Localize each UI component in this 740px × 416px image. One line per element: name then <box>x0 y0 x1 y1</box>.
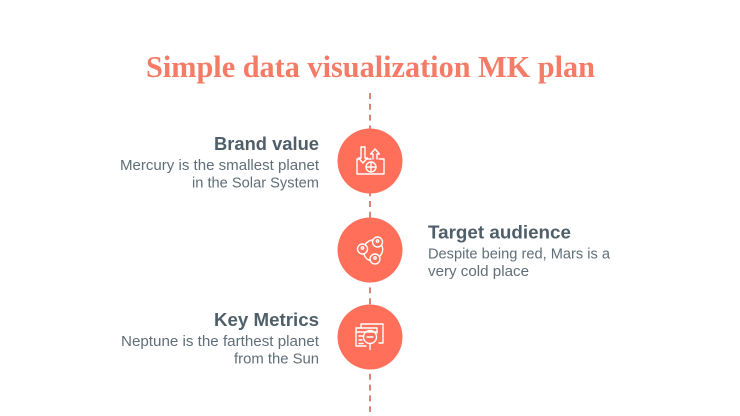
icon: folder with arrows and globe <box>357 147 384 174</box>
text: brand value description: Mercury is the smallest planet <box>120 158 319 174</box>
circle: target audience <box>338 218 402 282</box>
circle: key metrics <box>338 304 402 370</box>
text: key metrics heading: Key Metrics <box>214 309 319 330</box>
text: brand value heading: Brand value <box>214 133 319 154</box>
dashed timeline <box>369 93 371 412</box>
step: brand value <box>120 128 402 194</box>
text: key metrics description: from the Sun <box>234 352 319 368</box>
icon: connected people <box>358 237 383 264</box>
text: target audience heading: Target audience <box>428 222 571 242</box>
text: brand value description <box>120 158 319 192</box>
step: target audience <box>338 218 611 282</box>
text: key metrics description <box>121 334 319 368</box>
text: target audience description: Despite being red, Mars is a <box>428 246 611 262</box>
step: key metrics <box>121 304 402 370</box>
text: key metrics description: Neptune is the farthest planet <box>121 334 319 350</box>
text: target audience description: very cold place <box>428 264 529 280</box>
icon: report with magnifier <box>356 324 383 350</box>
title: Simple data visualization MK plan <box>146 49 595 84</box>
text: brand value description: in the Solar System <box>192 176 319 192</box>
text: target audience description <box>428 246 611 280</box>
circle: brand value <box>338 128 402 194</box>
